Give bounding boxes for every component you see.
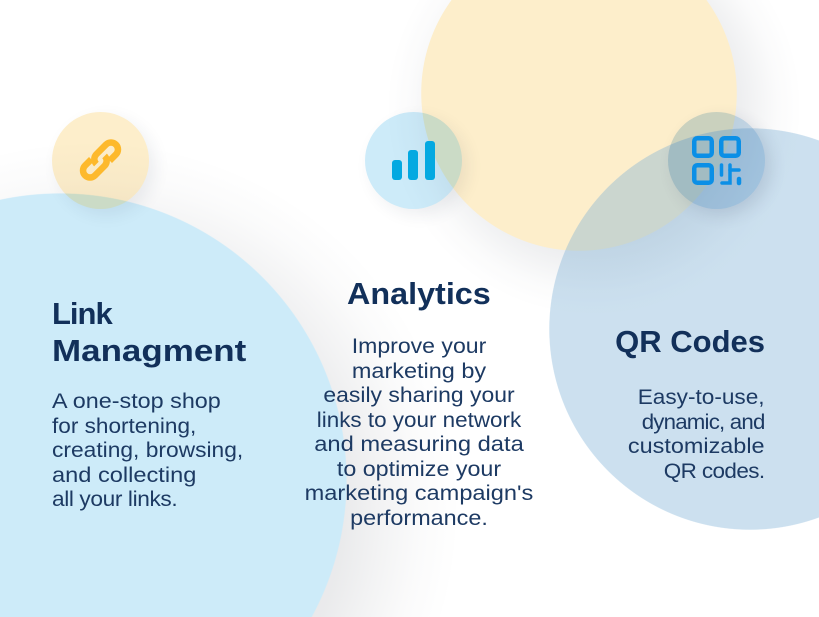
text: Link Management body	[52, 390, 243, 511]
icon: QR code	[692, 136, 742, 186]
text: Analytics body: marketing campaign's	[305, 482, 533, 505]
panel: large yellow circle	[421, 0, 737, 251]
text: Link Management body: and collecting	[52, 464, 196, 486]
text: Link Management body: for shortening,	[52, 414, 196, 438]
heading: QR Codes: QR Codes	[615, 324, 765, 359]
text: Analytics body: easily sharing your	[323, 384, 515, 407]
icon: analytics badge	[365, 112, 468, 214]
heading: Link Management	[52, 296, 246, 368]
icon: chain link	[80, 139, 122, 181]
text: Link Management body: A one-stop shop	[52, 390, 221, 413]
heading: Link Management: Link	[52, 296, 112, 331]
text: Analytics body: performance.	[350, 506, 488, 530]
heading: Analytics: Analytics	[347, 276, 491, 311]
text: QR Codes body: Easy-to-use,	[638, 386, 765, 409]
text: Link Management body: creating, browsing,	[52, 439, 243, 462]
icon: bar chart	[392, 141, 435, 180]
text: Analytics body: Improve your	[352, 335, 486, 358]
heading: Link Management: Managment	[52, 333, 246, 368]
text: QR Codes body: dynamic, and	[642, 410, 765, 434]
panel: right blue circle	[549, 128, 819, 530]
text: Analytics body: links to your network	[317, 408, 521, 432]
text: QR Codes body: QR codes.	[664, 460, 765, 482]
text: Analytics body: and measuring data	[314, 433, 524, 456]
text: QR Codes body: customizable	[628, 435, 765, 458]
icon: QR badge	[668, 112, 772, 216]
panel: large blue circle	[0, 193, 347, 617]
text: QR Codes body	[628, 386, 765, 482]
text: Link Management body: all your links.	[52, 488, 177, 511]
icon: link badge	[52, 112, 154, 214]
text: Analytics body: marketing by	[352, 360, 486, 382]
text: Analytics body	[305, 335, 533, 530]
text: Analytics body: to optimize your	[337, 458, 501, 480]
